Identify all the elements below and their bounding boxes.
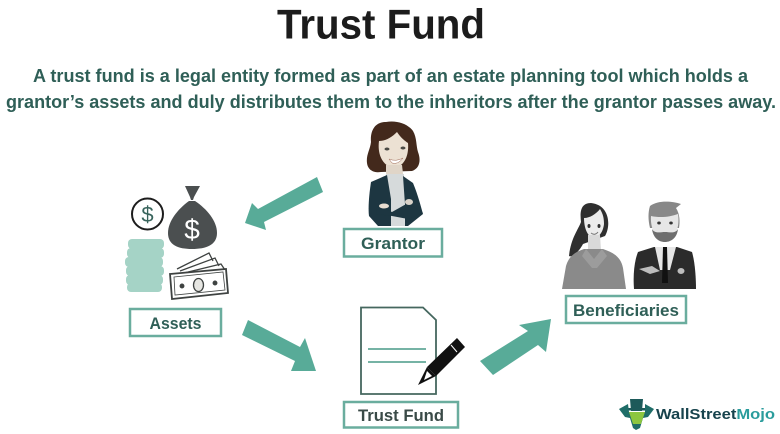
label: Grantor xyxy=(344,229,442,256)
label: Assets: Assets xyxy=(150,315,202,333)
icon: beneficiaries people xyxy=(562,202,696,289)
man xyxy=(634,202,696,289)
icon: banknotes xyxy=(170,253,228,299)
icon: grantor woman xyxy=(367,121,423,226)
icon: trust fund document with pen xyxy=(361,308,465,394)
title: Trust Fund xyxy=(277,0,485,48)
label: Assets xyxy=(130,309,221,336)
description text: grantor’s assets and duly distributes them to the inheritors after the grantor passes away. xyxy=(6,91,776,112)
icon: coin stack xyxy=(125,239,164,292)
arrow: grantor to assets xyxy=(245,177,323,230)
icon: dollar coin: $ xyxy=(141,202,154,227)
icon: bull mascot xyxy=(619,399,654,430)
logo: WallStreetMojo xyxy=(619,399,775,430)
label: Beneficiaries xyxy=(566,296,686,323)
shirt xyxy=(386,174,405,226)
document xyxy=(361,308,436,394)
neck xyxy=(386,165,404,182)
label: Beneficiaries: Beneficiaries xyxy=(573,302,679,320)
description text: A trust fund is a legal entity formed as part of an estate planning tool which holds a xyxy=(33,65,749,86)
icon: money bag: $ xyxy=(184,214,200,245)
icon: assets group xyxy=(125,186,228,299)
hair xyxy=(367,121,420,172)
logo: WallStreetMojo: WallStreet Mojo xyxy=(656,407,775,423)
document lines xyxy=(368,349,426,362)
label: Trust Fund xyxy=(344,402,458,428)
description text xyxy=(6,65,776,112)
eyes and smile xyxy=(384,148,390,150)
woman xyxy=(562,203,626,289)
pen xyxy=(418,338,465,385)
label: Trust Fund: Trust Fund xyxy=(358,407,444,425)
jacket xyxy=(369,175,391,226)
face xyxy=(379,132,408,168)
arrow: trust fund to beneficiaries xyxy=(480,319,551,375)
arrow: assets to trust fund xyxy=(242,320,316,371)
label: Grantor: Grantor xyxy=(361,235,426,253)
